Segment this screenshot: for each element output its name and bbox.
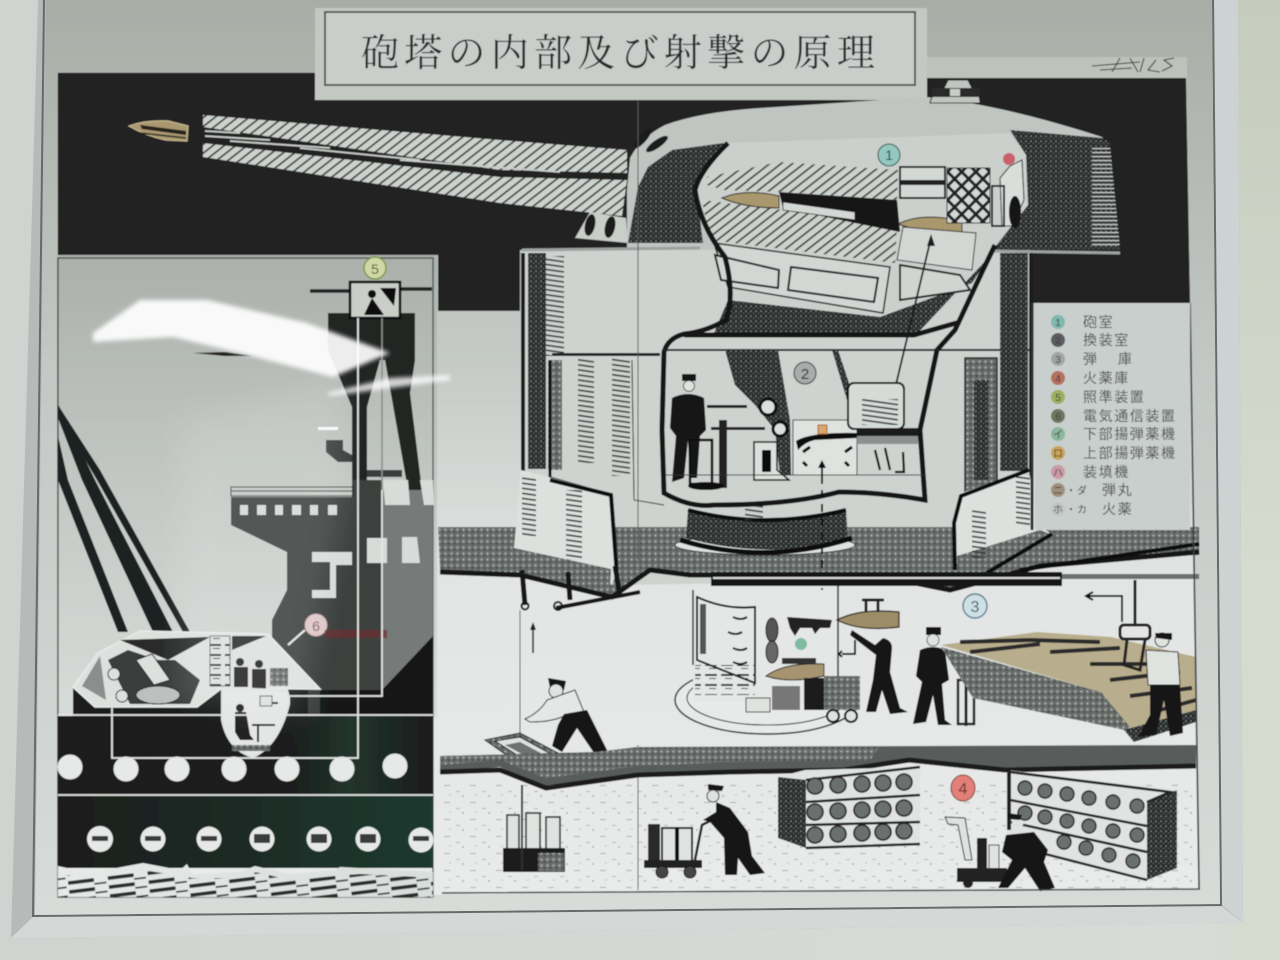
bridge rail	[231, 487, 353, 496]
barbette left wall	[521, 253, 664, 505]
black sky behind gun	[58, 73, 1190, 311]
legend row 5: 照準装置	[1083, 389, 1145, 405]
left hanger rollers	[522, 566, 640, 610]
legend row ho: 火薬	[1102, 501, 1133, 517]
thin yard streak	[193, 352, 253, 356]
legend row ni: 弾丸	[1102, 482, 1133, 498]
red reflection streak	[325, 630, 387, 638]
circle number 2	[794, 362, 816, 384]
upward arrow left	[530, 622, 536, 653]
legend row ni: ダ	[1077, 484, 1087, 497]
legend row 5	[1051, 389, 1145, 405]
legend row 1: 砲室	[1083, 314, 1114, 330]
legend row 3: 庫	[1118, 351, 1134, 367]
barbette left skirt	[514, 470, 618, 590]
deck cross section	[438, 527, 1199, 595]
legend row ho: ホ	[1053, 504, 1063, 516]
turret armour stippled left	[628, 143, 724, 243]
legend row ro: 上部揚弾薬機	[1083, 445, 1177, 461]
marker i on hoist	[795, 638, 807, 650]
legend row 3: 弾	[1083, 351, 1099, 367]
legend row 2: 換装室	[1083, 332, 1130, 348]
gun barrel	[203, 115, 627, 216]
legend row 6: 電気通信装置	[1083, 408, 1177, 424]
shell fired from muzzle	[129, 121, 188, 141]
barbette right skirt	[954, 470, 1199, 580]
hull lower	[58, 796, 433, 868]
legend row ho: ・	[1066, 505, 1076, 516]
fold and shaft vertical lines	[520, 100, 638, 890]
floor black underside	[440, 760, 1196, 788]
barbette top rail	[522, 248, 1120, 253]
crouching seaman	[525, 678, 608, 756]
legend row ho: カ	[1077, 504, 1087, 516]
ship tower body	[231, 480, 382, 716]
glass reflection glare	[93, 300, 450, 720]
circle number 1	[878, 144, 900, 166]
arrow and circle number 6	[288, 614, 327, 645]
wiring line across upper mast	[381, 318, 383, 490]
legend row ni: ニ	[1053, 486, 1063, 497]
gun port mantlet slots	[575, 212, 628, 243]
white wiring lines	[58, 318, 433, 795]
cart with canisters and sailor	[644, 784, 765, 878]
sailor at bin	[1138, 633, 1183, 737]
title box	[315, 8, 927, 100]
sailor and cart at rack	[945, 813, 1055, 891]
wall right side	[1236, 0, 1280, 960]
dashed hoist line	[821, 490, 823, 600]
arrow and circle number 6: 6	[312, 618, 320, 634]
circle number 4: 4	[959, 781, 968, 798]
shell bin	[941, 632, 1196, 742]
lower hoist cylinder	[675, 585, 860, 734]
big guns of ship	[58, 404, 190, 632]
legend panel	[1032, 303, 1190, 530]
paper strip above sky right	[926, 57, 1187, 78]
dark lower right	[320, 636, 433, 716]
legend row 4: 火薬庫	[1083, 370, 1130, 386]
mantlet upper slots	[632, 125, 670, 155]
legend row 1	[1051, 314, 1114, 330]
upper porthole row	[58, 754, 407, 781]
circle number 1: 1	[885, 147, 893, 163]
crane hook	[1120, 580, 1150, 670]
central pedestal ring	[675, 506, 855, 555]
legend row 3	[1051, 351, 1134, 367]
white hatch on right armour	[1092, 146, 1120, 248]
officer with lantern	[913, 627, 974, 726]
seaman at controls	[670, 374, 706, 482]
sailor lifting shell	[850, 630, 908, 714]
shell on hoist	[837, 600, 899, 628]
magazine rack centre	[778, 767, 920, 848]
hatch box on floor	[485, 733, 575, 775]
legend row 1: 1	[1055, 318, 1061, 329]
chamber ceiling line	[664, 349, 1030, 351]
sea waves	[58, 863, 433, 897]
circle number 5	[364, 257, 386, 279]
legend row ro: ロ	[1053, 449, 1063, 460]
circle number 2: 2	[801, 366, 809, 383]
bridge windows	[240, 505, 337, 515]
barbette white body	[514, 250, 1036, 585]
circle number 3: 3	[971, 599, 980, 616]
lower floor band	[440, 745, 1196, 788]
legend row ni: ・	[1066, 486, 1076, 497]
barbette right wall	[965, 253, 1033, 498]
control pit	[222, 688, 308, 757]
gun room thick outline	[662, 143, 995, 506]
legend row i: 下部揚弾薬機	[1083, 426, 1177, 442]
legend row 3: 3	[1055, 355, 1061, 366]
loader figure in gun room	[992, 160, 1024, 228]
rangefinder cabin	[350, 282, 400, 318]
legend row 2: 2	[1055, 336, 1061, 347]
gun room	[696, 133, 1028, 337]
forward turret cutaway	[73, 631, 320, 716]
lower porthole row	[87, 826, 434, 852]
turret armour stippled right	[993, 130, 1120, 250]
legend row ha: 装填機	[1083, 464, 1130, 480]
overhead rail	[711, 572, 1199, 586]
legend row ni	[1051, 482, 1133, 498]
legend row ha	[1051, 464, 1130, 480]
deck thick underline	[440, 552, 1199, 597]
poster paper	[58, 73, 1199, 897]
legend row 6: 6	[1055, 412, 1061, 423]
ship mast legs	[326, 313, 422, 490]
tower right gray wash	[382, 490, 433, 700]
floor speckled texture	[440, 747, 880, 778]
inset panel: battleship side view	[58, 255, 437, 897]
floor line under gun room	[684, 322, 960, 335]
circle number 4	[951, 775, 975, 801]
elbow arrow by hoist	[839, 640, 855, 657]
hull upper	[58, 716, 433, 796]
yard arm bars	[310, 289, 432, 291]
magazine floor speckle	[442, 785, 1197, 888]
title box: 砲塔の内部及び射撃の原理	[361, 33, 875, 75]
tower white cutouts	[312, 480, 434, 598]
legend row ho	[1051, 501, 1133, 517]
elbow arrow near bin	[1086, 592, 1122, 622]
scrawled signature	[1092, 58, 1174, 72]
canister rack left	[503, 785, 565, 872]
legend row 4	[1051, 370, 1130, 386]
legend row 5: 5	[1055, 393, 1061, 404]
red marker ha	[1003, 153, 1015, 165]
circle number 3	[963, 594, 987, 618]
legend row 2	[1051, 332, 1130, 348]
ammunition hoist arrow	[893, 234, 935, 397]
turret roof	[627, 97, 1110, 250]
legend row 4: 4	[1055, 374, 1061, 385]
cupola on turret roof	[930, 80, 980, 103]
bottom poster border	[442, 303, 1199, 893]
handling machinery	[666, 350, 925, 490]
legend row ha: ハ	[1053, 468, 1063, 479]
legend row i: イ	[1053, 430, 1063, 441]
magazine rack right	[1007, 770, 1177, 880]
circle number 5: 5	[371, 261, 379, 277]
